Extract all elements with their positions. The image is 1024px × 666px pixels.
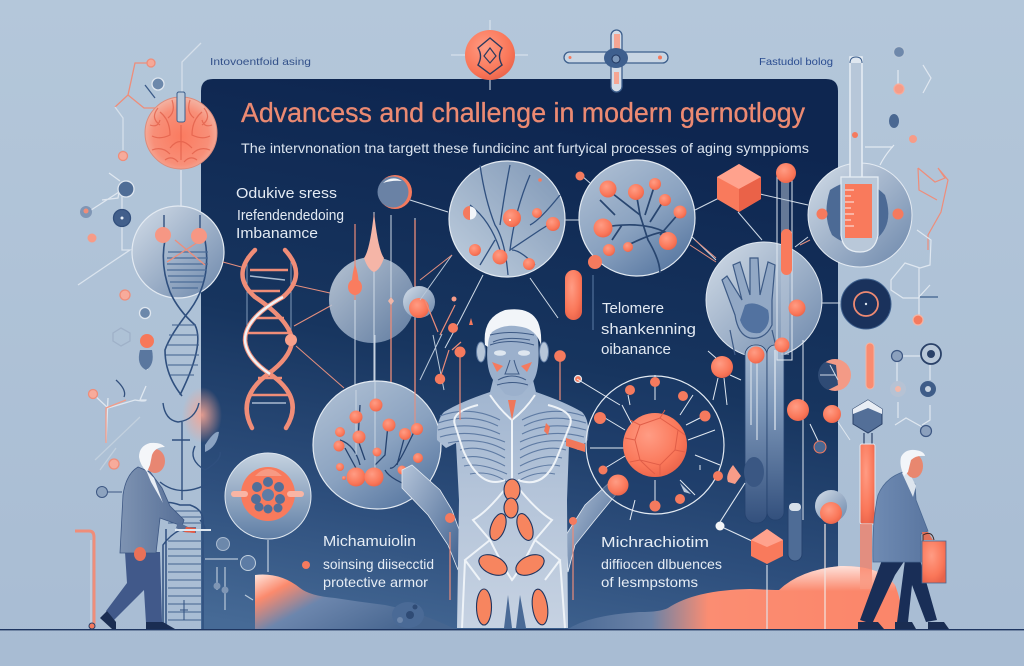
label: top right: Fastudol bolog bbox=[759, 56, 833, 68]
icon: top coral emblem bbox=[451, 20, 528, 90]
subtitle: The intervnonation tna targett these fundicinc ant furtyical processes of aging symppioms bbox=[241, 140, 809, 156]
circle: lower cluster tree bbox=[313, 333, 441, 509]
old man with cane bbox=[75, 443, 211, 629]
text block: protective armor: Michamuiolin bbox=[323, 533, 416, 550]
text block: telomere: shankenning bbox=[601, 321, 696, 338]
icon: cross connector bbox=[564, 30, 668, 92]
molecule spheres right of tubes bbox=[708, 338, 851, 629]
right node cluster bbox=[890, 344, 941, 436]
icon: sphere with coral crescent bbox=[378, 175, 448, 212]
connector to cube lower bbox=[716, 483, 783, 629]
text block: oxidative stress: Odukive sress bbox=[236, 185, 337, 202]
central figure: aged body with muscles bbox=[402, 309, 618, 628]
right arm bbox=[566, 482, 618, 572]
circle: big grey sphere with drops bbox=[329, 212, 435, 425]
torso bbox=[437, 380, 588, 628]
ground line bbox=[0, 629, 1024, 630]
small coral dot bbox=[302, 561, 310, 569]
lower ladder bbox=[163, 502, 205, 629]
text block: microbiota: of lesmpstoms bbox=[601, 574, 698, 590]
old man with shopping bag bbox=[858, 450, 949, 629]
circle: branching tree two bbox=[579, 160, 695, 276]
orange glow with vine shapes bbox=[160, 387, 222, 500]
icon: brain bbox=[145, 92, 217, 210]
tall coral capsules and hexagon bbox=[853, 343, 882, 589]
title: Advancess and challenge in modern gernotlogy bbox=[241, 97, 805, 128]
text block: oxidative stress: Irefendendedoing bbox=[237, 207, 344, 224]
nodes around figure bbox=[425, 296, 582, 600]
right mound bbox=[568, 566, 902, 629]
left arm bbox=[402, 465, 461, 570]
text block: microbiota bbox=[601, 534, 722, 590]
text block: microbiota: Michrachiotim bbox=[601, 534, 709, 551]
icon: dark target disc bbox=[841, 279, 891, 329]
text block: oxidative stress bbox=[236, 185, 344, 242]
circle: microbiota sphere bbox=[577, 375, 741, 520]
connector lines bbox=[420, 172, 841, 390]
text block: telomere bbox=[601, 300, 696, 358]
left lower molecules bbox=[88, 334, 154, 470]
tendon lines bbox=[454, 395, 571, 628]
chest stripes bbox=[438, 411, 586, 482]
circle: hand bbox=[706, 242, 822, 358]
text block: telomere: oibanance bbox=[601, 341, 671, 358]
icon: coral cube bbox=[717, 164, 761, 212]
circle: DNA strand bbox=[132, 206, 224, 396]
left mound bbox=[255, 575, 455, 629]
DNA helix bbox=[223, 250, 344, 428]
text block: protective armor bbox=[323, 533, 434, 590]
head bbox=[487, 320, 539, 396]
left molecular network bbox=[78, 43, 201, 346]
label: top left: Intovoentfoid asing bbox=[210, 56, 311, 68]
right molecular network bbox=[865, 46, 948, 325]
capsule and dots bbox=[565, 255, 602, 330]
icon: small connector nodes bbox=[205, 538, 256, 610]
test tube circle bbox=[808, 57, 912, 267]
circle: protective cluster bbox=[225, 453, 311, 572]
text block: protective armor: protective armor bbox=[323, 574, 428, 590]
text block: protective armor: soinsing diisecctid bbox=[323, 556, 434, 572]
text block: telomere: Telomere bbox=[602, 300, 664, 317]
text block: microbiota: diffiocen dlbuences bbox=[601, 556, 722, 572]
circle: branching tree one bbox=[449, 161, 565, 277]
panel: main dark background bbox=[201, 79, 838, 629]
text block: oxidative stress: Imbanamce bbox=[236, 225, 318, 242]
muscles bbox=[476, 479, 550, 626]
vertical tubes bbox=[744, 163, 806, 523]
